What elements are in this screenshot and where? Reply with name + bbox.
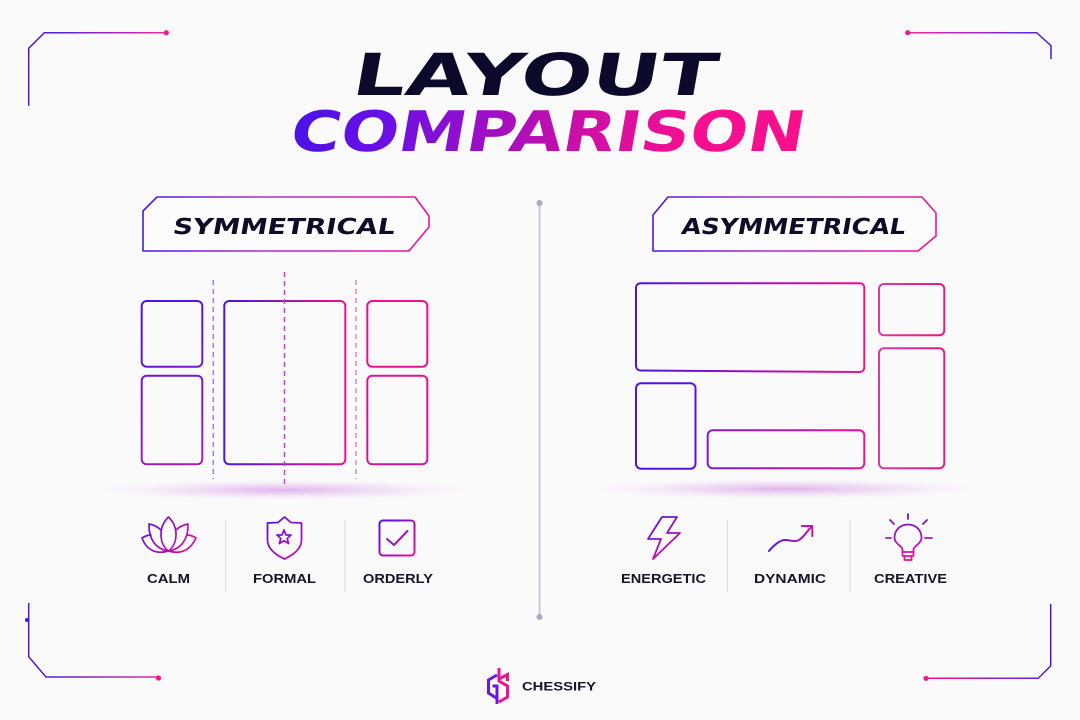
corner bracket: top right bbox=[905, 30, 1051, 59]
logo: chessify bbox=[488, 668, 596, 704]
trait: creative: CREATIVE bbox=[874, 571, 947, 586]
trait: orderly: ORDERLY bbox=[363, 571, 433, 586]
corner bracket: top left bbox=[29, 30, 169, 106]
trait: energetic bbox=[621, 517, 707, 586]
panel: symmetrical bbox=[99, 197, 469, 592]
icon: light bulb bbox=[886, 514, 932, 560]
trait: formal bbox=[253, 517, 316, 586]
trait: creative bbox=[874, 514, 947, 586]
logo: chessify: CHESSIFY bbox=[522, 682, 596, 694]
trait: calm: CALM bbox=[147, 571, 190, 586]
trait: dynamic: DYNAMIC bbox=[754, 571, 827, 586]
panel: asymmetrical bbox=[593, 197, 977, 592]
asymmetrical layout diagram bbox=[636, 283, 944, 469]
trait: orderly bbox=[363, 520, 433, 586]
title: LAYOUT bbox=[348, 41, 724, 109]
trait: dynamic bbox=[754, 526, 827, 586]
title: COMPARISON bbox=[286, 100, 811, 165]
shadow under asymmetrical diagram bbox=[593, 479, 977, 499]
separator bbox=[849, 520, 851, 592]
separator bbox=[726, 520, 728, 592]
trait: energetic: ENERGETIC bbox=[621, 571, 707, 586]
symmetrical layout diagram bbox=[142, 272, 427, 487]
title bbox=[286, 41, 811, 165]
heading badge: symmetrical bbox=[143, 197, 429, 251]
icon: checkbox bbox=[380, 520, 414, 556]
corner bracket: bottom left bbox=[25, 603, 161, 681]
separator bbox=[344, 520, 346, 592]
corner bracket: bottom right bbox=[923, 604, 1051, 681]
icon: lotus bbox=[142, 517, 196, 552]
icon: lightning bolt bbox=[648, 517, 680, 559]
trait: calm bbox=[142, 517, 196, 586]
shadow under symmetrical diagram bbox=[99, 480, 469, 500]
icon: shield with star bbox=[268, 517, 302, 559]
heading badge: asymmetrical bbox=[653, 197, 936, 251]
trait: formal: FORMAL bbox=[253, 571, 316, 586]
icon: rising arrow bbox=[769, 526, 812, 551]
separator bbox=[224, 520, 226, 592]
center divider bbox=[536, 200, 542, 620]
icon: chessify mark bbox=[488, 668, 508, 704]
heading badge: symmetrical: SYMMETRICAL bbox=[171, 214, 397, 240]
heading badge: asymmetrical: ASYMMETRICAL bbox=[679, 214, 908, 240]
